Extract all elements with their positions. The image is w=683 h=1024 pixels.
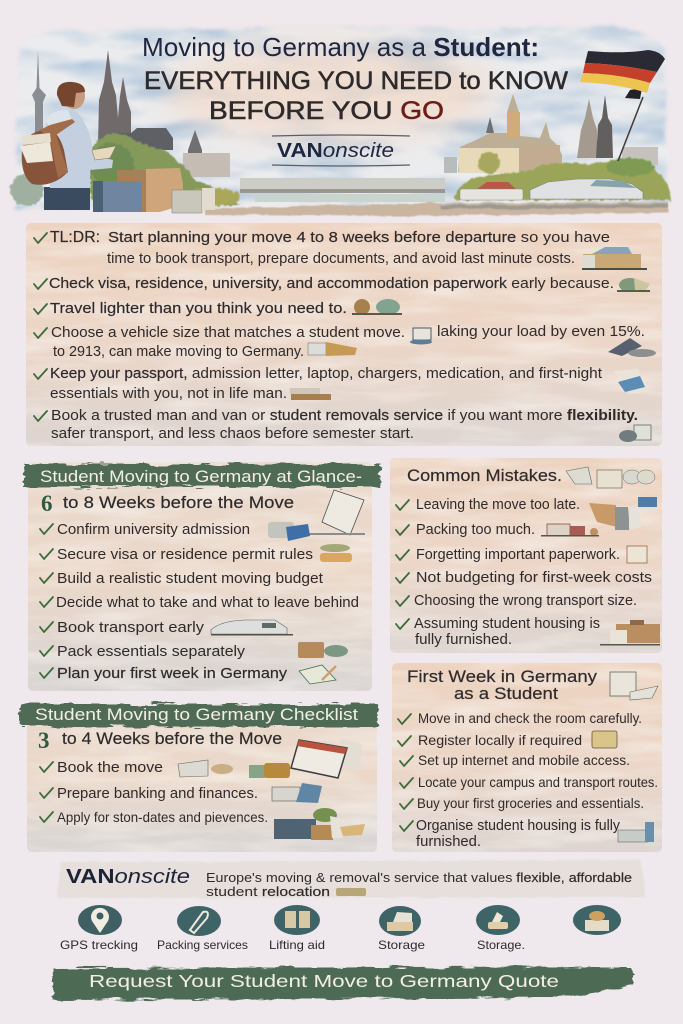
icon: van xyxy=(290,388,331,400)
trees right xyxy=(455,152,672,200)
line 10: safer transport, and less chaos before semester start. xyxy=(51,426,414,442)
house with red roof xyxy=(460,182,523,200)
item 3: Build a realistic student moving budget xyxy=(57,571,323,587)
panel: Student Moving to Germany at Glance xyxy=(24,462,380,691)
numeral 3: 3 xyxy=(38,728,50,753)
icon: bags stack xyxy=(320,544,352,562)
left skyline: tower xyxy=(32,50,46,135)
service: packing services xyxy=(157,906,248,952)
icon: papers xyxy=(610,672,658,700)
service: storage two xyxy=(476,905,525,952)
label: Lifting aid xyxy=(269,938,325,952)
icon: small van xyxy=(336,888,366,896)
item 5: Choosing the wrong transport size. xyxy=(414,593,637,609)
line 6: to 2913, can make moving to Germany. xyxy=(53,344,304,360)
label: Storage. xyxy=(477,938,525,952)
item 6 line 2: fully furnished. xyxy=(415,632,512,648)
panel: Student Moving to Germany Checklist xyxy=(20,704,378,852)
item 5: Book transport early xyxy=(57,620,205,636)
student with backpack xyxy=(20,82,116,210)
heading: Student Moving to Germany at Glance- xyxy=(40,467,362,486)
panel: First Week in Germany xyxy=(392,663,662,852)
icon: bags xyxy=(298,642,348,658)
item 4: Decide what to take and what to leave behind xyxy=(56,595,359,611)
item 2: Secure visa or residence permit rules xyxy=(57,547,313,563)
service: lifting aid xyxy=(269,905,325,952)
icon: storage box xyxy=(379,906,421,936)
item 2: Prepare banking and finances. xyxy=(57,786,258,802)
icon: train xyxy=(211,620,293,636)
icon: photo and bag xyxy=(619,425,651,442)
line 7: Keep your passport, admission letter, laptop, chargers, medication, and first-night xyxy=(50,365,603,382)
call to action banner xyxy=(53,967,632,1000)
icon: calendar xyxy=(291,739,362,778)
panel background xyxy=(392,663,662,852)
title line 2: EVERYTHING YOU NEED to KNOW xyxy=(144,67,568,95)
icon: laptop xyxy=(410,328,432,344)
sky wash xyxy=(16,26,668,208)
service: unlabelled box xyxy=(573,905,621,935)
icon: tape xyxy=(177,906,221,936)
service: storage xyxy=(378,906,425,952)
heading line 1: First Week in Germany xyxy=(407,668,598,686)
logo: VAN onscite xyxy=(66,866,190,888)
heading line 2: as a Student xyxy=(454,685,558,703)
item 3: Set up internet and mobile access. xyxy=(418,752,630,768)
panel: TL;DR xyxy=(26,223,662,446)
icon: notepad xyxy=(299,665,336,684)
icon: map pin xyxy=(78,905,122,935)
item 1: Leaving the move too late. xyxy=(416,497,580,513)
icon: green bag xyxy=(617,278,650,292)
icon: books and bottle xyxy=(618,822,654,842)
check marks xyxy=(40,524,53,678)
check marks xyxy=(34,233,47,421)
item 3: Apply for ston-dates and pievences. xyxy=(57,809,268,825)
icon: blue crate xyxy=(614,369,650,394)
line 8: essentials with you, not in life man. xyxy=(50,385,287,402)
check marks xyxy=(398,714,413,831)
item 1: Move in and check the room carefully. xyxy=(418,710,642,726)
label: Packing services xyxy=(157,938,248,952)
panel background xyxy=(28,462,372,691)
line 5 left: Choose a vehicle size that matches a student move. xyxy=(51,324,405,341)
icon: open box xyxy=(589,497,657,530)
icon: paperwork xyxy=(627,546,647,563)
item 2: Register locally if required xyxy=(418,732,582,748)
panel background xyxy=(390,458,662,653)
right skyline: palace xyxy=(444,94,562,173)
item 1: Confirm university admission xyxy=(57,522,250,538)
rule below logo xyxy=(272,165,410,166)
line 1: TL:DR: xyxy=(50,229,100,246)
label: GPS trecking xyxy=(60,938,138,952)
service icons row xyxy=(60,905,621,952)
icon: papers row xyxy=(566,467,655,488)
flag of Germany xyxy=(580,50,665,161)
title line 1: Moving to Germany as a Student: xyxy=(142,32,539,62)
cathedral xyxy=(98,50,230,177)
icon: paperwork and supplies xyxy=(178,760,290,778)
peach wash xyxy=(165,44,495,140)
icon: packed items xyxy=(541,524,599,536)
icon: building boxes xyxy=(582,247,647,270)
heading: Common Mistakes. xyxy=(407,467,562,485)
icon: grey case xyxy=(608,338,656,357)
icon: note xyxy=(592,731,617,748)
item 5: Buy your first groceries and essentials. xyxy=(417,795,644,811)
title xyxy=(142,32,568,125)
item 4: Not budgeting for first-week costs xyxy=(416,570,652,586)
icon: books and tablet xyxy=(272,783,322,803)
icon: box stack xyxy=(308,342,357,356)
banner background xyxy=(53,967,632,1000)
trees left xyxy=(10,133,240,207)
line 9: Book a trusted man and van or student removals service if you want more flexibility. xyxy=(51,407,638,424)
item 4: Locate your campus and transport routes. xyxy=(418,774,658,790)
panel background xyxy=(26,223,662,446)
brand logo xyxy=(272,135,410,166)
twin-spire church xyxy=(577,95,658,165)
luggage and boxes xyxy=(93,168,215,213)
icon: luggage xyxy=(268,522,310,541)
line 5 right: laking your load by even 15%. xyxy=(437,323,645,340)
service: GPS tracking xyxy=(60,905,138,952)
banner text: Request Your Student Move to Germany Quote xyxy=(89,971,559,991)
check marks xyxy=(396,500,409,629)
icon: bags xyxy=(274,905,320,935)
item 6 line 1: Organise student housing is fully xyxy=(416,818,621,834)
check marks xyxy=(40,762,53,822)
item 3: Forgetting important paperwork. xyxy=(416,547,620,563)
icon: bags and plants xyxy=(274,808,365,840)
item 6 line 2: furnished. xyxy=(416,834,481,850)
item 7: Plan your first week in Germany xyxy=(57,666,288,682)
line 1 text: Start planning your move 4 to 8 weeks before departure so you have xyxy=(108,229,610,246)
panel: Common Mistakes xyxy=(390,458,662,653)
rule above logo xyxy=(272,135,410,136)
numeral 6: 6 xyxy=(41,491,52,516)
line 4: Travel lighter than you think you need to. xyxy=(50,300,347,317)
icon: moving boxes xyxy=(600,620,660,646)
heading banner xyxy=(24,464,380,487)
item 6: Pack essentials separately xyxy=(57,644,246,660)
line 3: Check visa, residence, university, and accommodation paperwork early because. xyxy=(49,275,614,292)
item 6 line 1: Assuming student housing is xyxy=(414,616,600,632)
line 2: time to book transport, prepare documents, and avoid last minute costs. xyxy=(107,251,575,267)
subheading: to 4 Weeks before the Move xyxy=(62,730,282,748)
coach xyxy=(530,179,643,199)
item 1: Book the move xyxy=(57,760,163,776)
subheading: to 8 Weeks before the Move xyxy=(63,494,294,512)
logo text: VAN onscite xyxy=(277,140,394,162)
header illustration xyxy=(10,26,672,216)
item 2: Packing too much. xyxy=(416,522,535,538)
strip wash xyxy=(58,860,646,898)
bridge xyxy=(240,178,445,202)
icon: stacked storage xyxy=(476,905,520,935)
tagline line 2: student relocation xyxy=(206,884,330,899)
ground xyxy=(205,202,668,216)
label: Storage xyxy=(378,938,425,952)
heading: Student Moving to Germany Checklist xyxy=(35,705,358,724)
icon: document xyxy=(305,490,365,535)
title line 3: BEFORE YOU GO xyxy=(209,97,444,125)
icon: roll and bag xyxy=(352,299,402,315)
tagline line 1: Europe's moving & removal's service that values flexible, affordable xyxy=(206,870,632,885)
panel: brand strip xyxy=(58,860,646,899)
heading banner xyxy=(20,704,378,727)
panel background xyxy=(27,706,377,852)
